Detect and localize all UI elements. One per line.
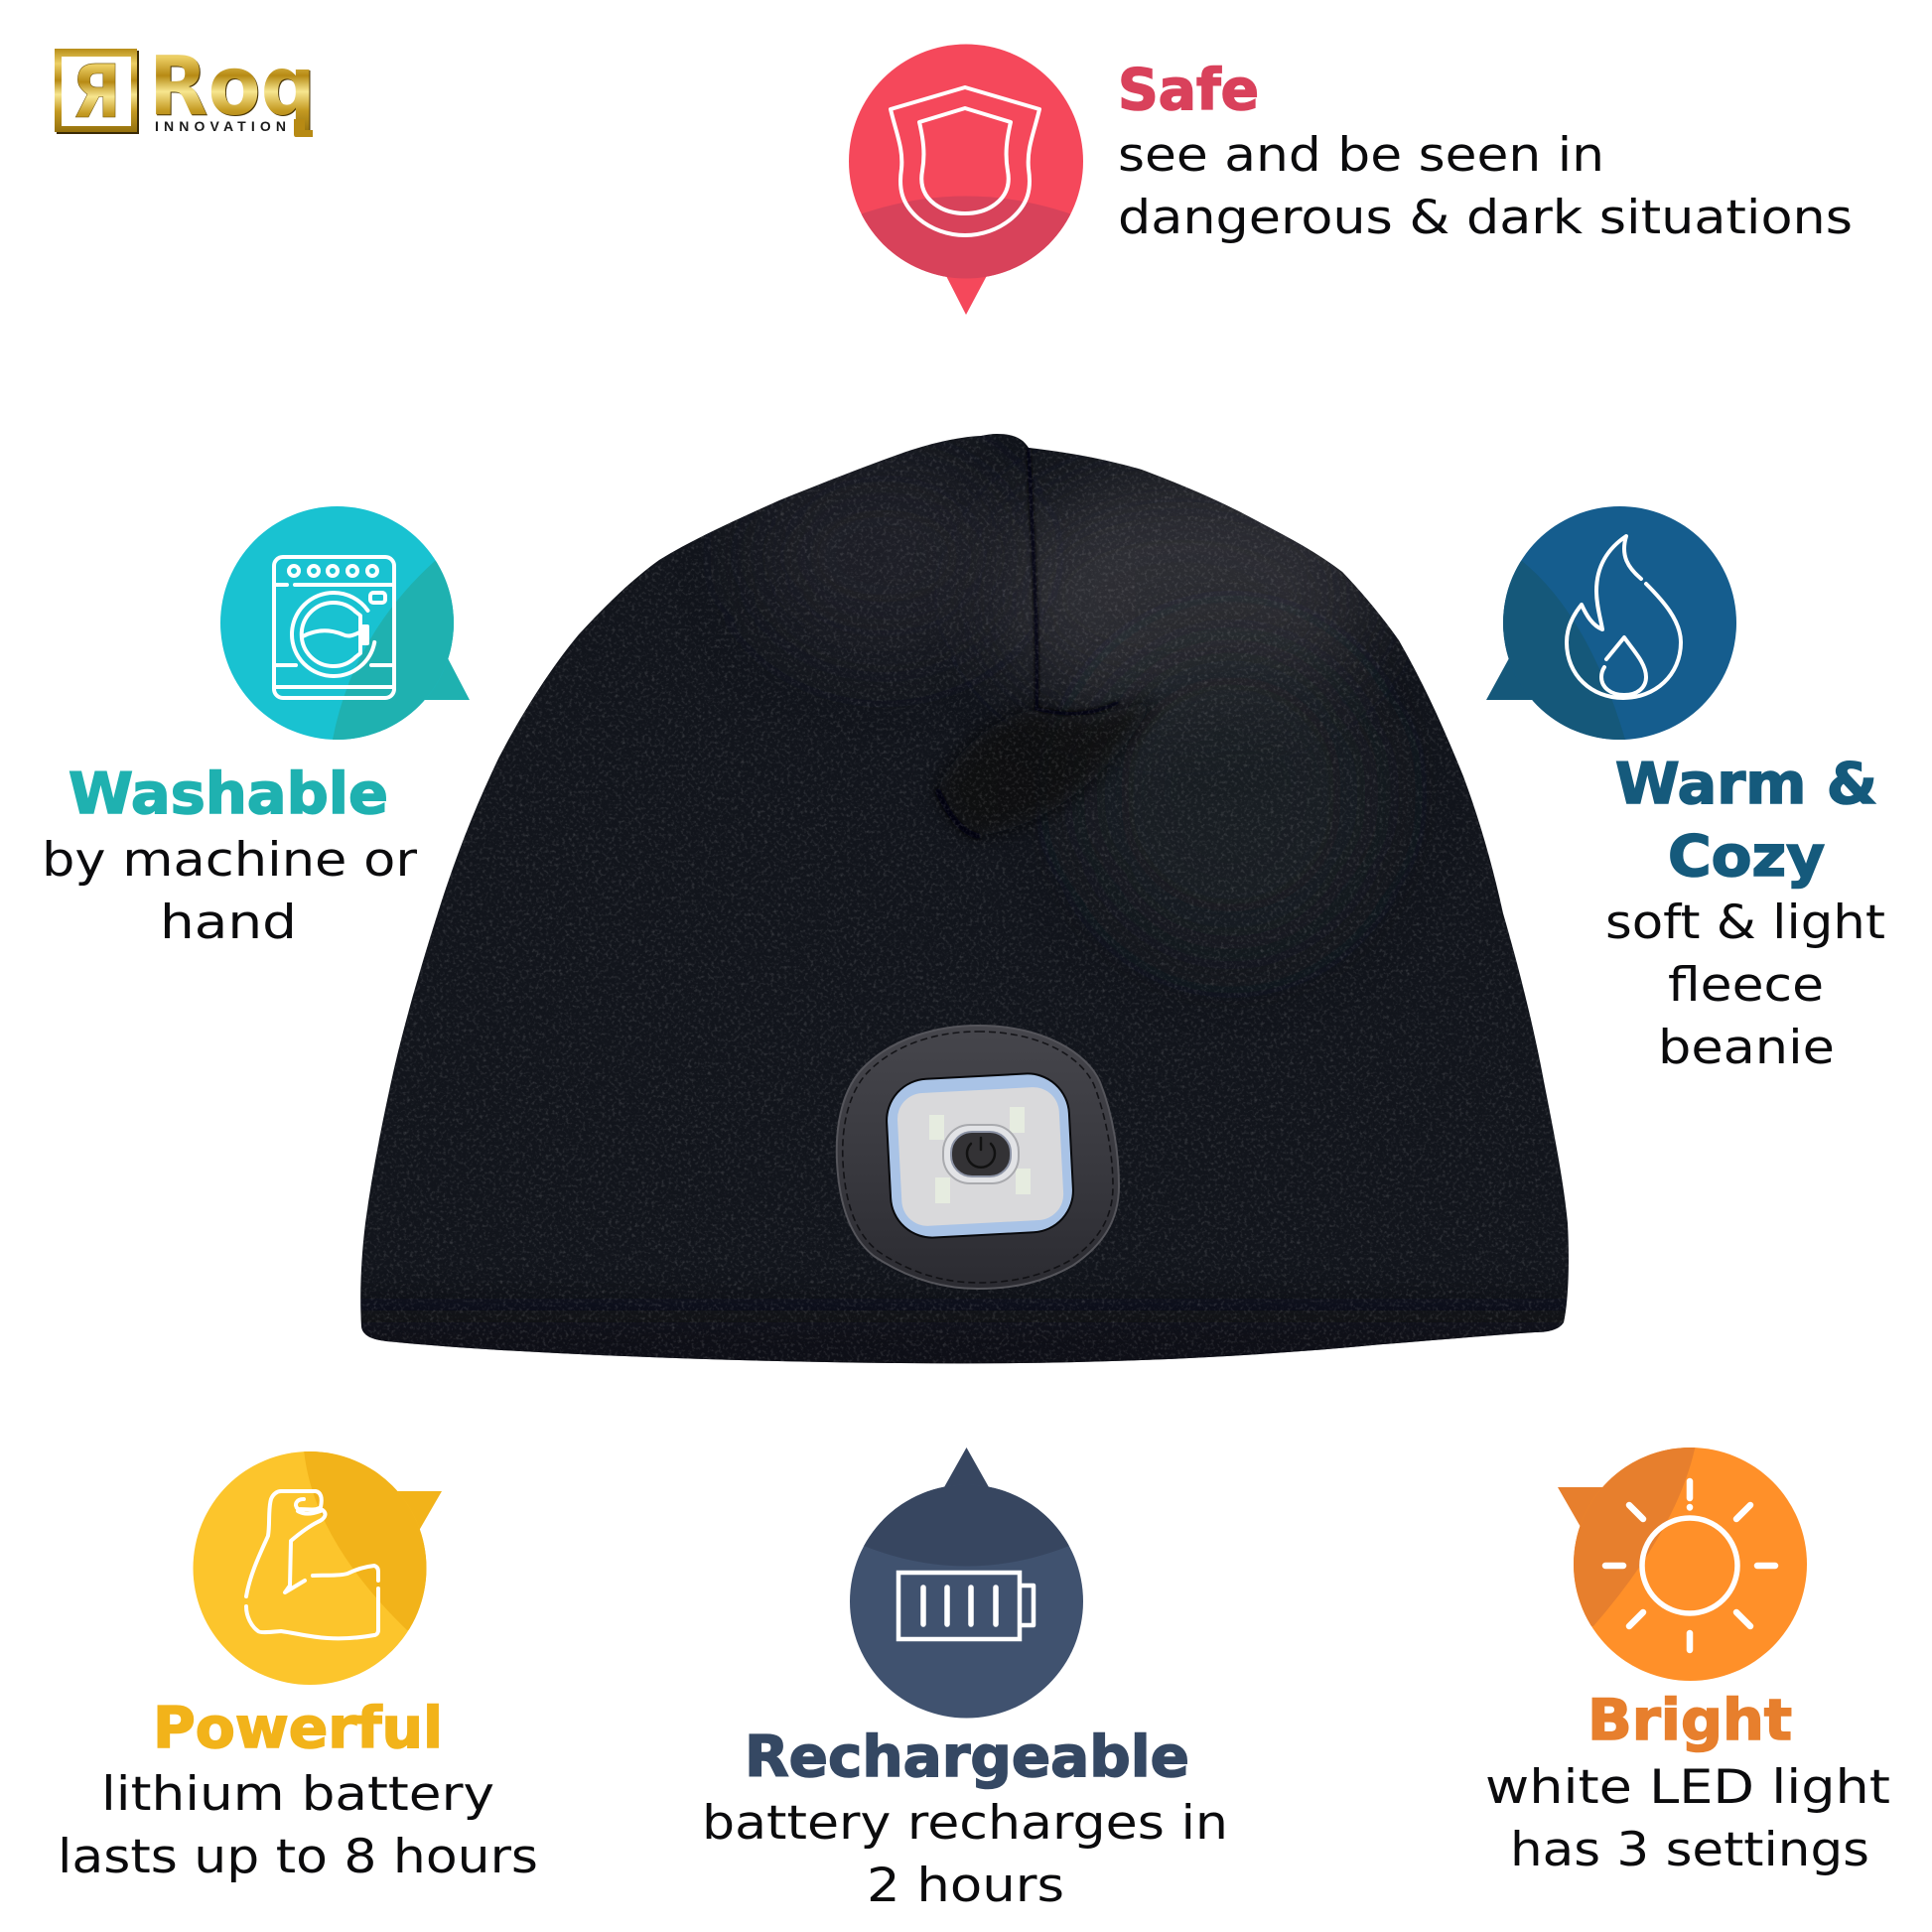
- LEDs: [929, 1107, 1031, 1203]
- logo wordmark: Roq: [149, 40, 316, 134]
- text: Warm and Cozy description: [1605, 896, 1885, 1075]
- logo square emblem: Я: [71, 50, 121, 135]
- text: Safe description: see and be seen in: [1118, 128, 1604, 183]
- panel: Bright: [1485, 1440, 1890, 1877]
- heading: Warm & Cozy: Cozy: [1668, 824, 1825, 890]
- heading: Bright: Bright: [1587, 1688, 1792, 1753]
- icon: sun bubble: [1558, 1440, 1807, 1681]
- power button: [943, 1125, 1019, 1183]
- text: Safe description: [1118, 128, 1853, 245]
- text: Rechargeable description: [702, 1796, 1228, 1913]
- icon: flexed arm bubble: [193, 1445, 442, 1685]
- text: Powerful description: [58, 1767, 538, 1884]
- text: Powerful description: lasts up to 8 hours: [58, 1830, 538, 1884]
- panel: Warm and Cozy: [1486, 506, 1885, 1075]
- heading: Safe: Safe: [1118, 58, 1259, 123]
- text: Bright description: has 3 settings: [1510, 1823, 1869, 1877]
- heading: Washable: Washable: [69, 761, 388, 827]
- panel: Rechargeable: [702, 1448, 1228, 1913]
- text: Rechargeable description: battery recharges in: [702, 1796, 1228, 1851]
- logo square emblem: [55, 49, 139, 135]
- panel: Washable: [42, 506, 470, 950]
- text: Washable description: hand: [160, 896, 297, 950]
- logo: Roq Innovation: [55, 40, 317, 137]
- logo wordmark: INNOVATION: [155, 118, 286, 134]
- icon: battery bubble: [850, 1448, 1083, 1718]
- text: Warm and Cozy description: beanie: [1658, 1021, 1835, 1075]
- text: Washable description: [42, 833, 418, 950]
- LED headlamp module: [837, 1026, 1119, 1289]
- heading: Powerful: Powerful: [153, 1696, 443, 1761]
- light panel: [885, 1071, 1075, 1240]
- text: Warm and Cozy description: fleece: [1668, 958, 1824, 1013]
- panel: Powerful: [58, 1445, 538, 1884]
- icon: shield bubble: [844, 44, 1088, 315]
- icon: flame bubble: [1486, 506, 1736, 745]
- text: Washable description: by machine or: [42, 833, 418, 888]
- heading: Warm & Cozy: Warm &: [1615, 752, 1877, 817]
- beanie fold creases: [938, 449, 1117, 836]
- text: Rechargeable description: 2 hours: [867, 1859, 1064, 1913]
- photo: fleece LED beanie: [338, 417, 1598, 1390]
- panel: Safe: [844, 44, 1853, 315]
- heading: Rechargeable: Rechargeable: [745, 1725, 1189, 1790]
- text: Safe description: dangerous & dark situations: [1118, 191, 1853, 245]
- leather patch: [837, 1026, 1119, 1289]
- icon: washing machine bubble: [220, 506, 470, 745]
- beanie body: [338, 417, 1598, 1390]
- text: Bright description: white LED light: [1485, 1760, 1890, 1815]
- text: Bright description: [1485, 1760, 1890, 1877]
- text: Warm and Cozy description: soft & light: [1605, 896, 1885, 950]
- logo wordmark: Roq: [150, 41, 317, 135]
- beanie fold shadow: [936, 696, 1158, 836]
- text: Powerful description: lithium battery: [101, 1767, 494, 1822]
- heading: Warm & Cozy: [1615, 752, 1877, 890]
